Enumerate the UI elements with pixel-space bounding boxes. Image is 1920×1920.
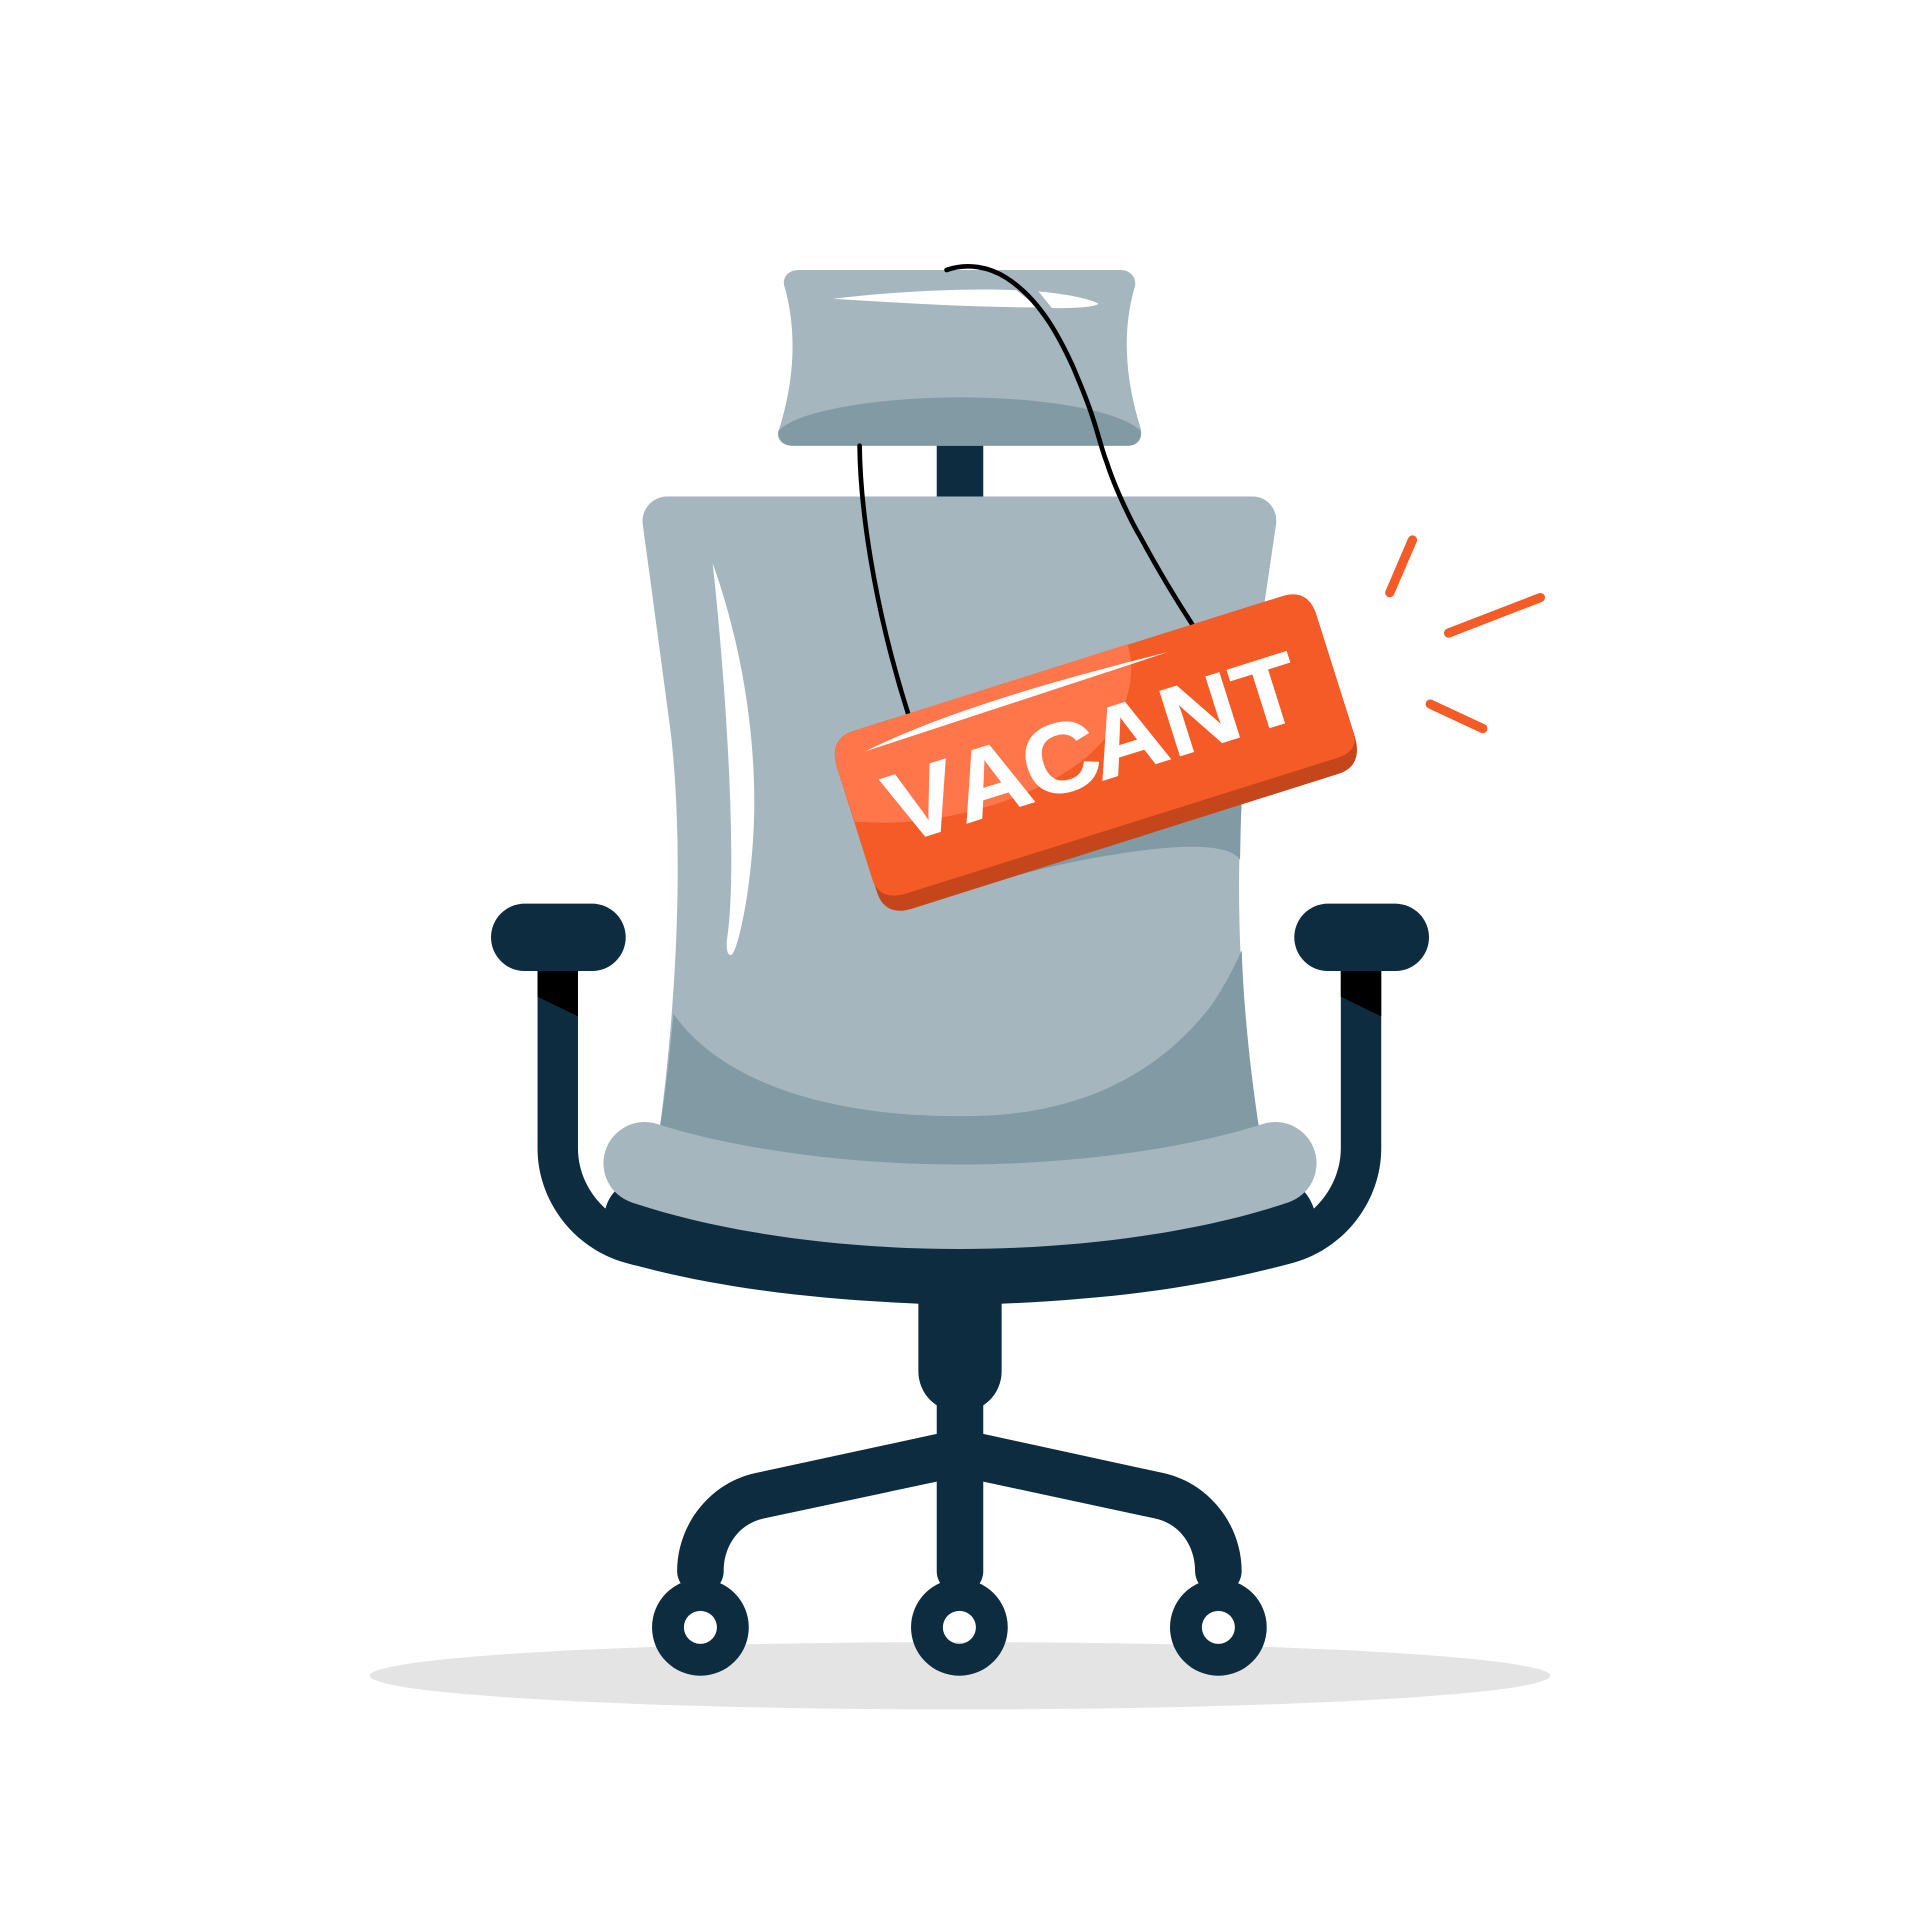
seat cushion	[603, 1122, 1317, 1249]
sign face	[835, 594, 1355, 896]
left arm shadow	[538, 971, 578, 1016]
sign light sheen	[835, 644, 1131, 823]
chair base	[652, 1224, 1267, 1676]
floor shadow	[370, 1642, 1550, 1709]
right wheel	[1170, 1579, 1267, 1676]
shadow cast by sign	[900, 784, 1242, 912]
sign underside	[835, 594, 1357, 911]
headrest cushion	[778, 270, 1141, 446]
right hanging rope	[947, 266, 1194, 627]
backrest lower shading	[660, 950, 1259, 1176]
left wheel	[652, 1579, 749, 1676]
attention sparks	[1390, 540, 1540, 729]
centre wheel	[911, 1579, 1008, 1676]
centre leg	[937, 1347, 983, 1594]
spark top	[1390, 540, 1412, 593]
sign glint	[866, 652, 1168, 751]
left armrest	[491, 904, 626, 971]
headrest highlight left	[833, 289, 1038, 307]
left leg	[677, 1432, 945, 1594]
headrest shading	[779, 397, 1141, 446]
spark middle	[1449, 598, 1540, 633]
right leg	[975, 1432, 1242, 1594]
backrest highlight	[713, 563, 754, 955]
left hanging rope	[860, 446, 909, 715]
backrest panel	[643, 497, 1276, 1176]
backrest	[643, 497, 1276, 1176]
headrest highlight right	[1038, 291, 1098, 308]
spark bottom	[1430, 704, 1483, 729]
headrest	[778, 270, 1141, 446]
headrest post	[937, 441, 983, 502]
gas cylinder	[918, 1224, 1002, 1412]
vacant sign	[835, 594, 1357, 911]
right arm shadow	[1341, 971, 1381, 1016]
sign text: VACANT	[873, 632, 1314, 865]
seat frame and arm supports	[538, 971, 1381, 1305]
right armrest	[1294, 904, 1429, 971]
